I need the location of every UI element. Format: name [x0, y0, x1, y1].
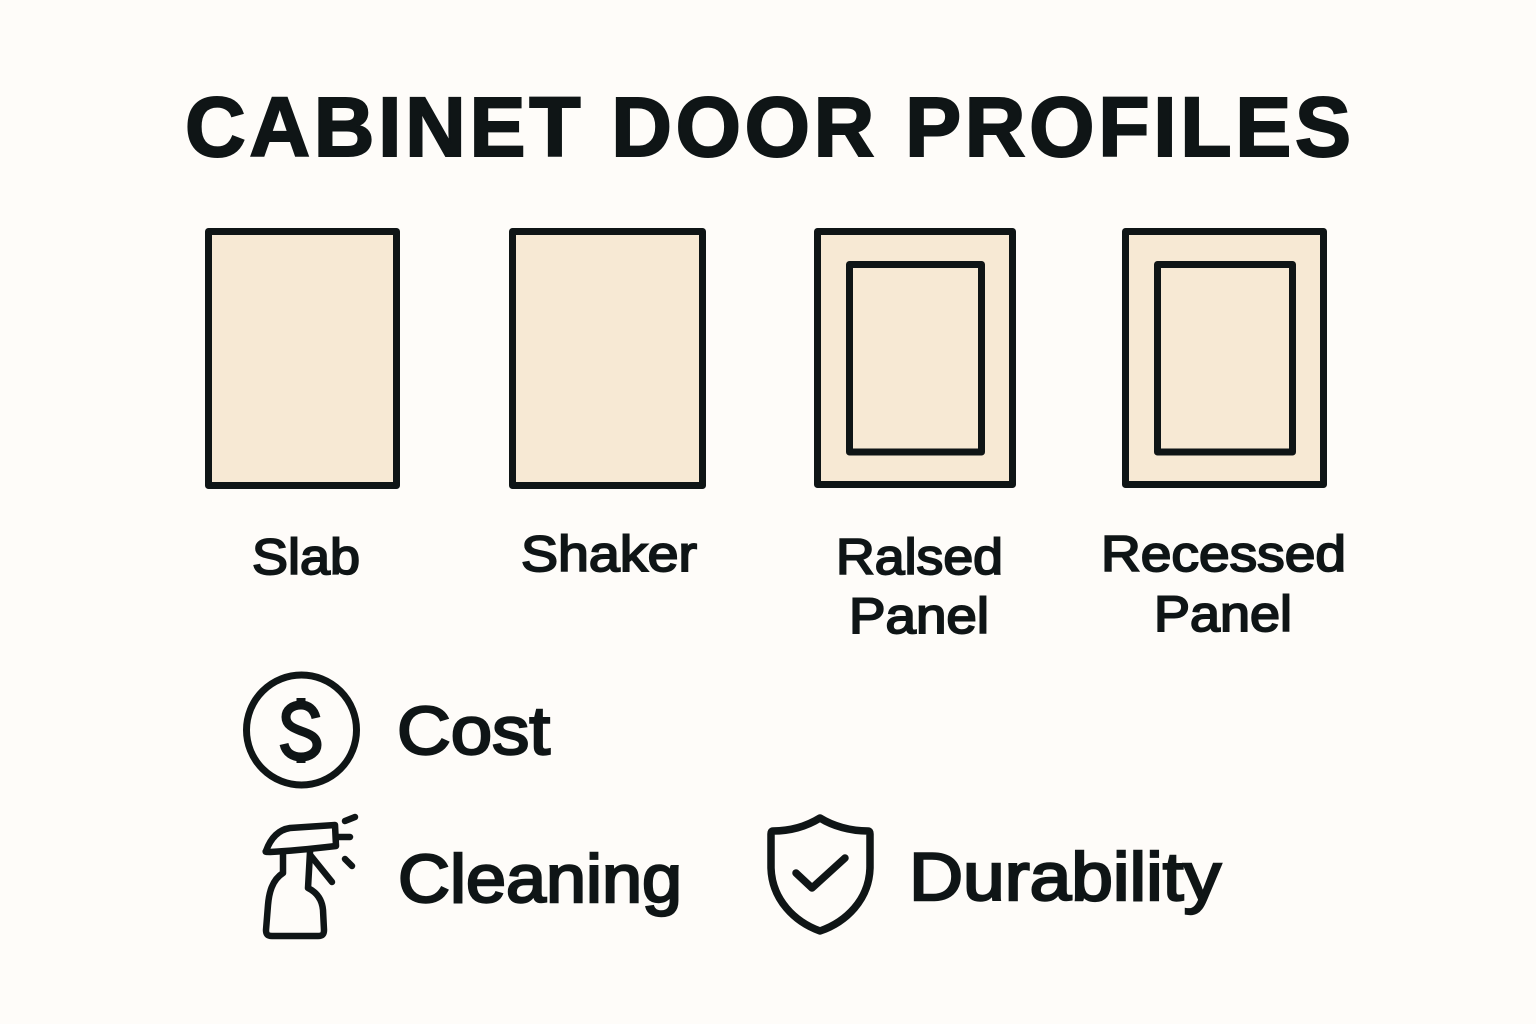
- icon: dollar coin: [246, 675, 356, 785]
- door: recessed panel: [1126, 232, 1324, 484]
- icon: spray bottle: [266, 817, 355, 936]
- label: raised panel: [836, 529, 1003, 644]
- door: slab: [208, 232, 396, 486]
- label: durability: Durability: [909, 839, 1221, 915]
- label: recessed panel: Recessed: [1101, 526, 1346, 582]
- label: raised panel: Panel: [849, 588, 989, 644]
- label: recessed panel: [1101, 526, 1346, 642]
- label: cost: Cost: [397, 693, 550, 769]
- label: slab: Slab: [252, 529, 360, 585]
- door: shaker: [512, 232, 702, 486]
- title: CABINET DOOR PROFILES: [185, 80, 1351, 174]
- label: shaker: Shaker: [521, 526, 697, 582]
- label: raised panel: Ralsed: [836, 529, 1003, 585]
- icon: shield with check: [771, 818, 870, 931]
- label: cleaning: Cleaning: [398, 841, 682, 917]
- label: recessed panel: Panel: [1154, 586, 1292, 642]
- door: raised panel: [818, 232, 1012, 484]
